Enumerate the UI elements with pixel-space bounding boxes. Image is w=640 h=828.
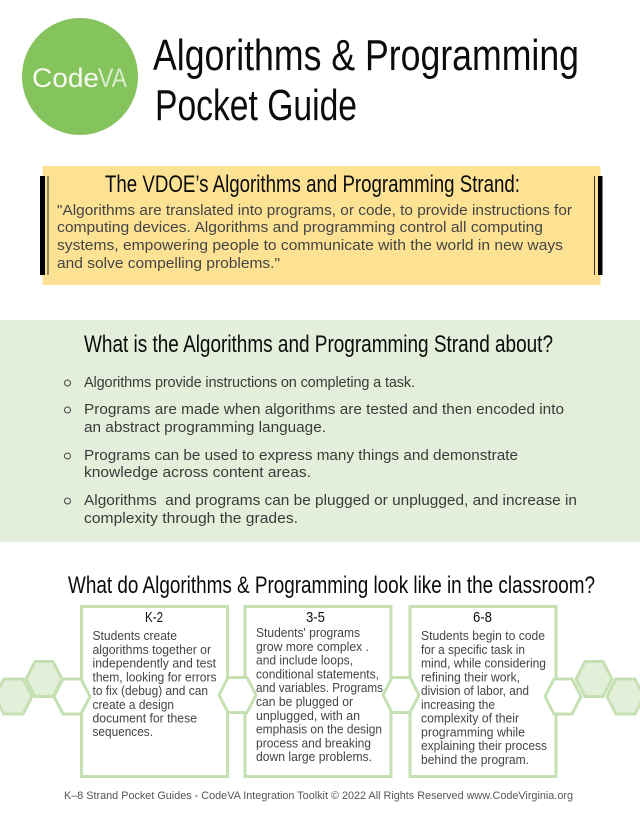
icon: hexagon connector 1 bbox=[219, 678, 256, 712]
logo: CodeVA circle bbox=[22, 18, 138, 135]
text: 3-5 column bbox=[256, 609, 383, 764]
text: 6-8 column: programming while bbox=[421, 724, 525, 740]
panel: K-2 bbox=[82, 606, 228, 776]
text: 3-5 column: emphasis on the design bbox=[256, 722, 382, 736]
text: 3-5 column: Students' programs bbox=[256, 625, 360, 640]
footer: K–8 Strand Pocket Guides - CodeVA Integration Toolkit © 2022 All Rights Reserved www.CodeVirginia.org bbox=[64, 790, 573, 802]
title: Pocket Guide bbox=[155, 81, 357, 130]
text: K-2 column: create a design bbox=[92, 697, 174, 712]
text: K-2 column: algorithms together or bbox=[92, 642, 212, 657]
text: K-2 column bbox=[92, 609, 217, 739]
text: 6-8 column: 6-8 bbox=[473, 609, 492, 626]
bullet list: Programs are made when algorithms are tested and then encoded into bbox=[84, 402, 564, 418]
text: 3-5 column: conditional statements, bbox=[256, 666, 379, 682]
heading: VDOE strand: The VDOE’s Algorithms and Programming Strand: bbox=[105, 171, 520, 198]
panel: what is the strand about bbox=[0, 320, 640, 542]
text: K-2 column: to fix (debug) and can bbox=[92, 683, 208, 698]
text: 3-5 column: 3-5 bbox=[306, 609, 325, 626]
text: 6-8 column: for a specific task in bbox=[421, 642, 525, 657]
text: 3-5 column: process and breaking bbox=[256, 736, 371, 750]
panel: 6-8 bbox=[410, 606, 556, 776]
bullet list: an abstract programming language. bbox=[84, 420, 326, 436]
icon: right hexagon chain bbox=[545, 662, 640, 714]
text: 6-8 column: increasing the bbox=[421, 697, 495, 712]
text: 3-5 column: down large problems. bbox=[256, 749, 372, 764]
text: 6-8 column bbox=[421, 609, 547, 767]
text: 6-8 column: refining their work, bbox=[421, 670, 520, 684]
text: 6-8 column: division of labor, and bbox=[421, 683, 529, 698]
quote text bbox=[57, 203, 572, 272]
icon: left hexagon chain bbox=[0, 662, 90, 714]
bullet list: knowledge across content areas. bbox=[84, 465, 311, 481]
text: K-2 column: them, looking for errors bbox=[92, 670, 217, 684]
text: K-2 column: document for these bbox=[92, 710, 197, 726]
logo: CodeVA circle: VA bbox=[98, 63, 127, 93]
text: K-2 column: Students create bbox=[92, 628, 177, 643]
panel: 3-5 bbox=[245, 606, 391, 776]
text: 6-8 column: mind, while considering bbox=[421, 656, 546, 670]
text: 3-5 column: grow more complex . bbox=[256, 639, 369, 654]
text: K-2 column: independently and test bbox=[92, 656, 216, 670]
bullet list: Algorithms and programs can be plugged or unplugged, and increase in bbox=[84, 493, 577, 509]
quote text: computing devices. Algorithms and programming control all computing bbox=[57, 220, 543, 236]
text: 3-5 column: and variables. Programs bbox=[256, 680, 383, 695]
icon: hexagon connector 2 bbox=[383, 678, 419, 712]
text: 6-8 column: behind the program. bbox=[421, 752, 529, 767]
text: 6-8 column: Students begin to code bbox=[421, 628, 545, 643]
text: K-2 column: K-2 bbox=[145, 609, 163, 626]
bullet list: Algorithms provide instructions on completing a task. bbox=[84, 375, 415, 391]
title bbox=[153, 31, 579, 130]
text: 6-8 column: complexity of their bbox=[421, 710, 520, 726]
quote text: and solve compelling problems." bbox=[57, 256, 280, 272]
text: 3-5 column: unplugged, with an bbox=[256, 708, 360, 723]
bullet list bbox=[64, 375, 577, 527]
text: 3-5 column: and include loops, bbox=[256, 652, 353, 668]
quote text: "Algorithms are translated into programs, or code, to provide instructions for bbox=[57, 203, 572, 219]
bullet list: Programs can be used to express many things and demonstrate bbox=[84, 448, 518, 464]
panel: VDOE strand definition bbox=[40, 166, 602, 285]
quote text: systems, empowering people to communicate with the world in new ways bbox=[57, 238, 563, 254]
text: 6-8 column: explaining their process bbox=[421, 738, 547, 753]
text: 3-5 column: can be plugged or bbox=[256, 694, 354, 709]
logo: CodeVA circle: Code bbox=[32, 63, 99, 93]
bullet list: complexity through the grades. bbox=[84, 511, 298, 527]
text: K-2 column: sequences. bbox=[92, 724, 153, 739]
